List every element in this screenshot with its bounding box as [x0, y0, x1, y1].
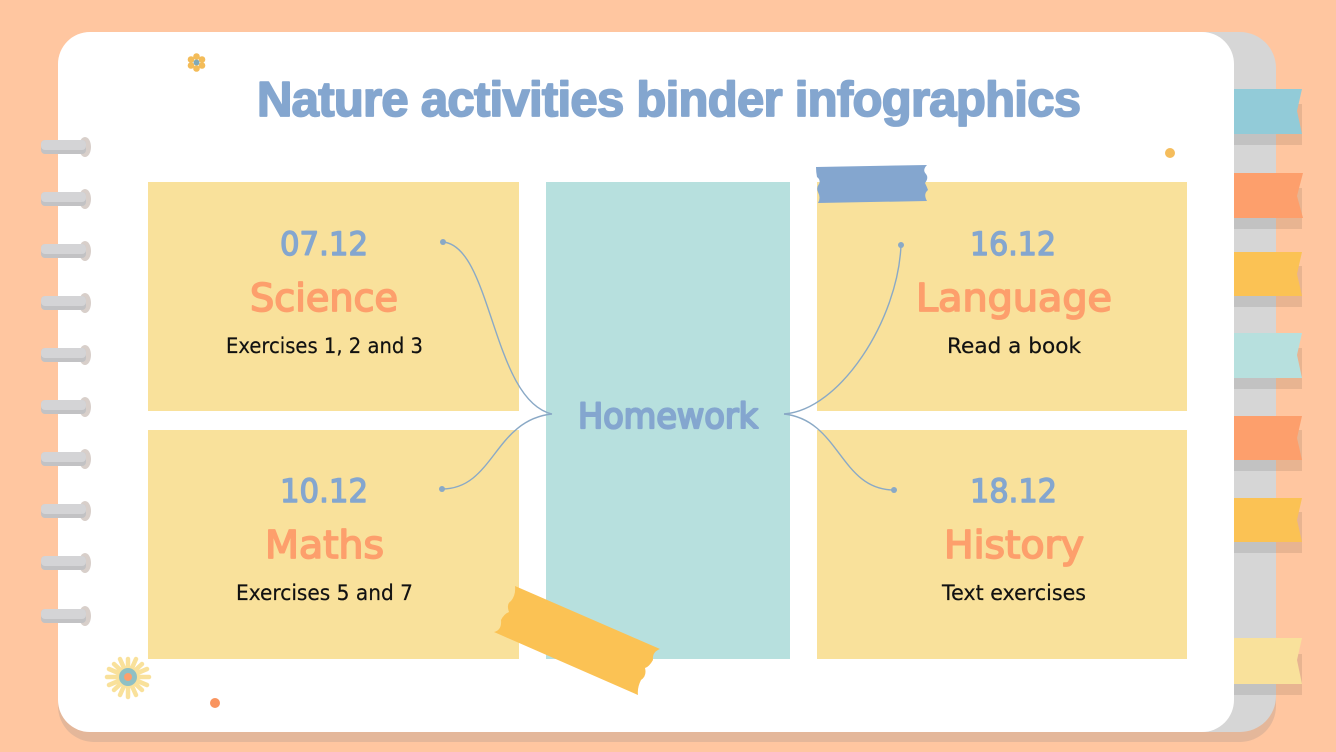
- tape: yellow: [494, 586, 660, 695]
- tab: orange: [1234, 173, 1303, 229]
- tab: mint: [1234, 333, 1302, 389]
- science date: 07.12: [280, 225, 368, 263]
- history date: 18.12: [970, 472, 1057, 510]
- history text: Text exercises: [941, 581, 1086, 605]
- panel: homework: [546, 182, 790, 659]
- tab: yellow: [1234, 252, 1302, 307]
- tab: yellow lower: [1234, 498, 1302, 553]
- tape: blue: [816, 165, 928, 203]
- panel: language: [817, 182, 1187, 411]
- science text: Exercises 1, 2 and 3: [226, 334, 423, 358]
- language heading: Language: [916, 276, 1112, 320]
- connector: language to homework: [784, 242, 904, 414]
- connector: maths to homework: [439, 414, 552, 492]
- panel: science: [148, 182, 519, 411]
- maths heading: Maths: [265, 523, 384, 567]
- language text: Read a book: [947, 334, 1082, 358]
- history heading: History: [944, 523, 1084, 567]
- maths date: 10.12: [280, 472, 368, 510]
- connector: science to homework: [440, 239, 552, 414]
- science heading: Science: [250, 276, 398, 320]
- dot: yellow: [1165, 148, 1175, 158]
- binder index tabs: [1234, 89, 1303, 695]
- title: Nature activities binder infographics: [257, 73, 1081, 127]
- connector: history to homework: [784, 414, 897, 493]
- panel: maths: [148, 430, 519, 659]
- icon: small flower: [188, 53, 205, 72]
- tab: orange lower: [1234, 416, 1302, 471]
- tab: blue: [1234, 89, 1302, 145]
- panel: history: [817, 430, 1187, 659]
- dot: orange: [210, 698, 220, 708]
- homework label: Homework: [578, 397, 759, 437]
- tab: pale yellow: [1234, 638, 1302, 695]
- maths text: Exercises 5 and 7: [236, 581, 413, 605]
- binder rings: [41, 137, 91, 626]
- icon: daisy flower: [107, 659, 149, 697]
- language date: 16.12: [970, 225, 1056, 263]
